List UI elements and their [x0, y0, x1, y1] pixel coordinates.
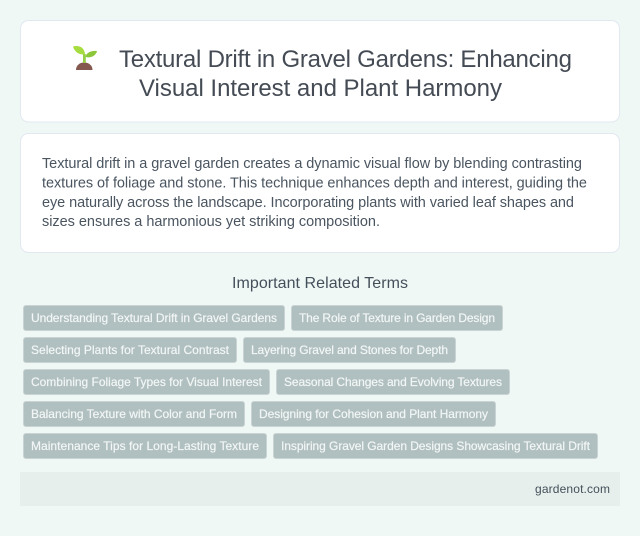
heading: related terms: Important Related Terms: [232, 275, 408, 292]
tag: Combining Foliage Types for Visual Interest: [31, 375, 263, 389]
tag: [24, 306, 284, 330]
title: Textural Drift in Gravel Gardens: Enhancing: [119, 46, 572, 73]
tag: Layering Gravel and Stones for Depth: [251, 343, 448, 357]
tag: Designing for Cohesion and Plant Harmony: [259, 407, 488, 421]
tag: Selecting Plants for Textural Contrast: [31, 343, 230, 357]
text block: description: sizes ensures a harmonious yet striking composition.: [42, 214, 380, 230]
tag: The Role of Texture in Garden Design: [299, 311, 495, 325]
tag: [276, 370, 510, 394]
footer: [20, 472, 620, 506]
panel: title card: [20, 20, 620, 122]
tag: [252, 402, 496, 426]
title: Visual Interest and Plant Harmony: [139, 75, 502, 102]
tag: Understanding Textural Drift in Gravel Gardens: [31, 311, 277, 325]
panel: description: [20, 134, 620, 252]
footer: gardenot.com: [535, 482, 610, 496]
tag: Seasonal Changes and Evolving Textures: [284, 375, 502, 389]
tag: [24, 434, 266, 458]
tag: [24, 370, 270, 394]
tag: [292, 306, 502, 330]
tag: [24, 402, 244, 426]
icon: seedling: [73, 46, 97, 70]
text block: description: [42, 156, 587, 230]
title: [119, 46, 572, 102]
tag: Inspiring Gravel Garden Designs Showcasing Textural Drift: [281, 439, 591, 453]
text block: description: Textural drift in a gravel garden creates a dynamic visual flow by blending contrasting: [42, 156, 582, 172]
text block: description: textures of foliage and stone. This technique enhances depth and interest, guiding the: [42, 176, 587, 192]
tag: [274, 434, 598, 458]
tag: Balancing Texture with Color and Form: [31, 407, 237, 421]
tag: [244, 338, 456, 362]
tag list: [24, 306, 598, 458]
text block: description: eye naturally across the landscape. Incorporating plants with varied leaf shapes and: [42, 195, 574, 211]
tag: [24, 338, 236, 362]
tag: Maintenance Tips for Long-Lasting Texture: [31, 439, 259, 453]
